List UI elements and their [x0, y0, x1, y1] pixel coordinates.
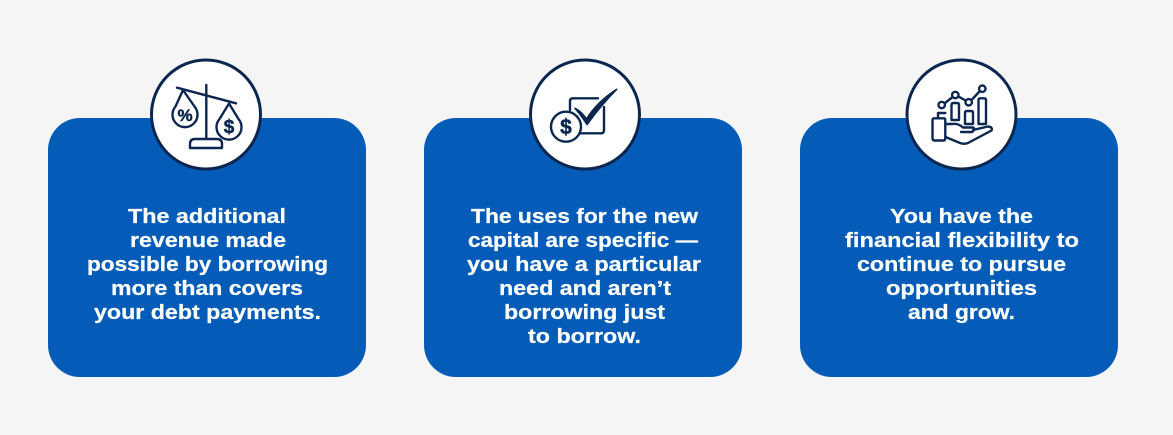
- icon: balance scale: [152, 60, 260, 169]
- card background: [800, 118, 1118, 377]
- panel: flexibility: [800, 60, 1118, 377]
- icon: balance scale: %: [177, 106, 193, 125]
- card text: and grow.: [908, 301, 1015, 324]
- card background: [424, 118, 742, 377]
- card text: capital are specific —: [468, 229, 699, 252]
- card text: [467, 205, 701, 348]
- card text: The additional: [128, 205, 286, 228]
- card text: your debt payments.: [94, 301, 321, 324]
- card text: to borrow.: [528, 325, 641, 348]
- card text: possible by borrowing: [87, 253, 328, 276]
- card text: [845, 205, 1079, 324]
- icon: coin and checkbox: [530, 60, 640, 169]
- card text: you have a particular: [467, 253, 701, 276]
- icon: growth chart on hand: [907, 60, 1016, 169]
- card text: continue to pursue: [857, 253, 1066, 276]
- card text: need and aren’t: [499, 277, 671, 300]
- card text: revenue made: [130, 229, 286, 252]
- card text: borrowing just: [504, 301, 665, 324]
- card text: The uses for the new: [471, 205, 698, 228]
- card background: [48, 118, 366, 377]
- card text: financial flexibility to: [845, 229, 1079, 252]
- card text: [87, 205, 328, 324]
- card text: more than covers: [111, 277, 303, 300]
- panel: uses: [424, 60, 742, 377]
- panel: revenue: [48, 60, 366, 377]
- icon: balance scale: $: [224, 117, 235, 138]
- card text: opportunities: [886, 277, 1037, 300]
- card text: You have the: [890, 205, 1033, 228]
- icon: coin and checkbox: $: [560, 116, 572, 139]
